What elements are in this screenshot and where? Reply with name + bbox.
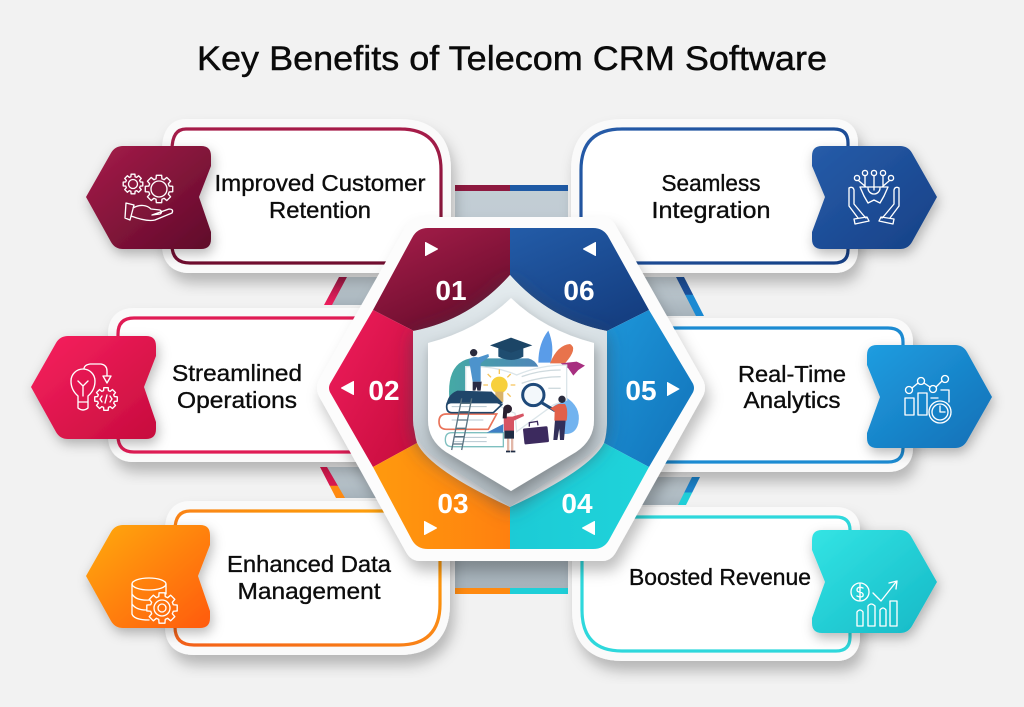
label 02: Operations — [177, 387, 297, 413]
icon badge 05 — [867, 345, 992, 448]
segment 01 — [373, 228, 510, 331]
icon badge 02 — [31, 336, 156, 439]
icon badge 06 — [812, 146, 937, 249]
label 06: Integration — [652, 197, 770, 223]
label 03: Management — [238, 578, 381, 604]
icon badge 04 — [812, 530, 937, 633]
graduation cap — [498, 348, 523, 360]
icon badge 01 — [86, 146, 211, 249]
panel: 05 Real-Time Analytics — [640, 328, 992, 462]
label 05: Analytics — [744, 387, 840, 413]
label 04: Boosted Revenue — [629, 564, 811, 590]
hub: numbers and arrows — [342, 242, 679, 534]
open book — [466, 365, 567, 432]
title: Key Benefits of Telecom CRM Software — [197, 40, 827, 78]
ladder — [452, 398, 472, 450]
segment 02 — [329, 310, 417, 467]
segment 03 — [373, 443, 510, 549]
person on books — [473, 382, 482, 391]
hub: white hexagon frame — [317, 217, 705, 561]
card outline 04 — [582, 517, 850, 651]
arrows — [342, 242, 679, 534]
card outline 01 — [172, 129, 441, 263]
number 03: 03 — [437, 488, 469, 519]
icon badge 03 — [86, 525, 210, 628]
teal and blue blobs — [449, 358, 538, 398]
label 01: Improved Customer — [214, 170, 426, 196]
panel: 02 Streamlined Operations — [31, 318, 400, 452]
segment 05 — [604, 310, 694, 467]
magnifying glass — [523, 384, 544, 406]
number 01: 01 — [435, 275, 467, 306]
bottom book — [445, 433, 503, 447]
label 06: Seamless — [662, 170, 760, 196]
card outline 03 — [175, 511, 440, 645]
label 03: Enhanced Data — [227, 551, 391, 577]
briefcase — [523, 426, 549, 445]
connector shapes behind the hub — [320, 185, 704, 594]
label 05: Real-Time — [738, 361, 846, 387]
panel: 01 Improved Customer Retention — [86, 129, 441, 263]
number 06: 06 — [563, 275, 595, 306]
panel: 06 Seamless Integration — [581, 129, 937, 263]
top book — [447, 401, 502, 413]
shield inner white — [428, 298, 594, 491]
panel: 04 Boosted Revenue — [582, 517, 937, 651]
leaves — [538, 331, 552, 363]
label 01: Retention — [269, 197, 371, 223]
man — [553, 420, 566, 440]
shield outer ring — [413, 275, 607, 507]
hub: numbered segments — [329, 228, 694, 549]
card outline 06 — [581, 129, 848, 263]
number 02: 02 — [368, 375, 400, 406]
card outline 05 — [640, 328, 903, 462]
middle book — [439, 414, 497, 429]
hub: shield — [413, 275, 607, 507]
label 02: Streamlined — [172, 360, 302, 386]
card outline 02 — [118, 318, 400, 452]
segment 06 — [510, 228, 649, 331]
illustration: books and people — [439, 331, 585, 452]
number 05: 05 — [625, 375, 657, 406]
segment 04 — [510, 443, 649, 549]
panel: 03 Enhanced Data Management — [86, 511, 440, 645]
number 04: 04 — [561, 488, 593, 519]
woman — [507, 437, 513, 451]
light bulb — [491, 377, 508, 393]
